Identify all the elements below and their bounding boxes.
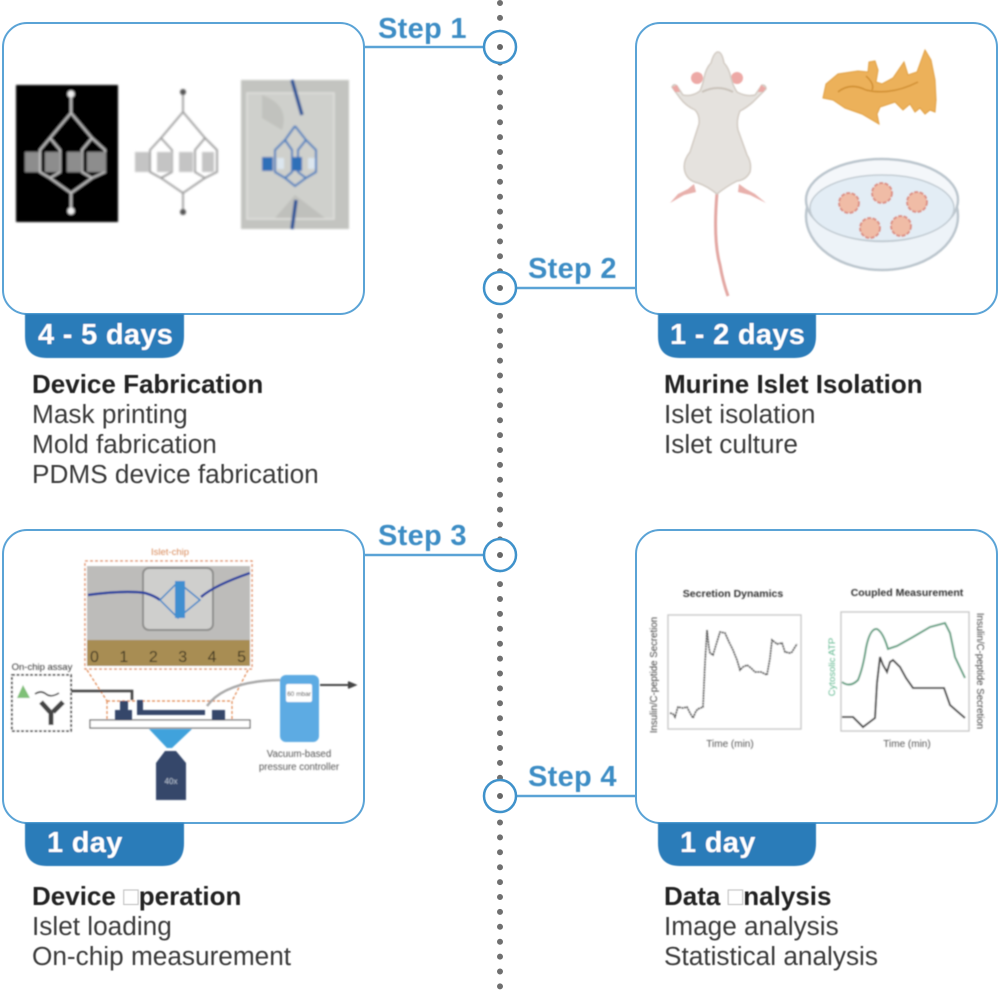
text block: device operation: On-chip measurement bbox=[32, 941, 292, 971]
label: Step 4: Step 4 bbox=[528, 761, 617, 793]
badge: 1 day right bbox=[658, 823, 816, 866]
chart: coupled measurement: Time (min) bbox=[883, 739, 931, 750]
white device outline bbox=[135, 89, 217, 215]
zoom guide lines bbox=[87, 670, 248, 720]
text block: device fabrication: Device Fabrication bbox=[32, 369, 263, 399]
timeline dotted spine bbox=[497, 3, 503, 990]
label: pressure controller: Vacuum-based bbox=[267, 749, 331, 760]
text block: data analysis bbox=[664, 881, 878, 971]
text block: device operation: Device □peration bbox=[32, 881, 241, 911]
black photomask bbox=[16, 85, 118, 222]
text block: murine islet isolation: Islet culture bbox=[664, 429, 798, 459]
text block: device fabrication: PDMS device fabrication bbox=[32, 459, 319, 489]
icon: petri dish with islets bbox=[806, 159, 958, 270]
badge: 4-5 days bbox=[25, 314, 184, 358]
PDMS device photo bbox=[241, 80, 349, 229]
outlet tubing bbox=[207, 680, 280, 706]
text block: data analysis: Statistical analysis bbox=[664, 941, 878, 971]
step 1 connector and node bbox=[364, 31, 516, 63]
label: Step 2: Step 2 bbox=[528, 253, 617, 285]
text block: murine islet isolation bbox=[664, 369, 923, 459]
label: Step 3: Step 3 bbox=[378, 520, 467, 552]
chart: coupled measurement: Insulin/C-peptide Secretion bbox=[974, 613, 985, 729]
chip photo with ruler bbox=[85, 561, 252, 669]
illustration: device operation setup bbox=[12, 547, 355, 800]
step 4 connector and node bbox=[484, 780, 636, 812]
badge: 1 day left bbox=[25, 823, 184, 866]
text block: data analysis: Image analysis bbox=[664, 911, 839, 941]
badge: 4-5 days: 4 - 5 days bbox=[38, 319, 173, 351]
text block: device fabrication bbox=[32, 369, 319, 489]
text block: device fabrication: Mask printing bbox=[32, 399, 188, 429]
chart: secretion dynamics: Secretion Dynamics bbox=[683, 588, 783, 600]
label: on-chip assay: On-chip assay bbox=[12, 662, 73, 673]
outlet arrow bbox=[320, 682, 355, 688]
badge: 1 day right: 1 day bbox=[680, 827, 756, 859]
panel: step 1 frame bbox=[3, 23, 364, 314]
microscope stage and chip cross-section bbox=[90, 700, 250, 728]
illustration: rat, pancreas and dish bbox=[670, 50, 958, 296]
illustration: device masks and photo bbox=[16, 80, 349, 229]
text block: device fabrication: Mold fabrication bbox=[32, 429, 217, 459]
text block: murine islet isolation: Murine Islet Isolation bbox=[664, 369, 923, 399]
badge: 1-2 days bbox=[658, 314, 816, 358]
panel: step 4 frame bbox=[636, 530, 997, 823]
panel: step 3 frame bbox=[3, 530, 364, 823]
chart: secretion dynamics: Insulin/C-peptide Secretion bbox=[649, 617, 660, 733]
objective lens: 40x bbox=[165, 777, 177, 786]
label: chip name: Islet-chip bbox=[151, 547, 189, 558]
text block: data analysis: Data □nalysis bbox=[664, 881, 831, 911]
pressure controller bbox=[280, 675, 319, 742]
badge: 1 day left: 1 day bbox=[47, 827, 123, 859]
badge: 1-2 days: 1 - 2 days bbox=[670, 319, 805, 351]
step 3 connector and node bbox=[364, 539, 516, 571]
chart: secretion dynamics: Time (min) bbox=[706, 739, 754, 750]
chart: coupled measurement: Coupled Measurement bbox=[851, 587, 964, 599]
text block: device operation bbox=[32, 881, 292, 971]
text block: murine islet isolation: Islet isolation bbox=[664, 399, 815, 429]
tubing from assay to chip bbox=[71, 691, 132, 700]
chart: coupled measurement: Cytosolic ATP bbox=[827, 638, 838, 696]
label: Step 1: Step 1 bbox=[378, 13, 467, 45]
icon: rat bbox=[670, 52, 766, 296]
label: pressure controller: pressure controller bbox=[259, 762, 340, 773]
step 2 connector and node bbox=[484, 272, 636, 304]
on-chip assay box bbox=[12, 675, 71, 731]
illustration: data charts bbox=[649, 587, 985, 750]
pressure controller: 60 mbar bbox=[287, 691, 312, 698]
text block: device operation: Islet loading bbox=[32, 911, 172, 941]
light cone bbox=[149, 729, 192, 748]
objective lens bbox=[156, 751, 186, 800]
icon: pancreas bbox=[823, 50, 936, 124]
panel: step 2 frame bbox=[636, 23, 997, 314]
chart: coupled measurement bbox=[827, 587, 985, 750]
chart: secretion dynamics bbox=[649, 588, 801, 750]
chip photo with ruler: 0 1 2 3 4 5 bbox=[90, 649, 246, 666]
